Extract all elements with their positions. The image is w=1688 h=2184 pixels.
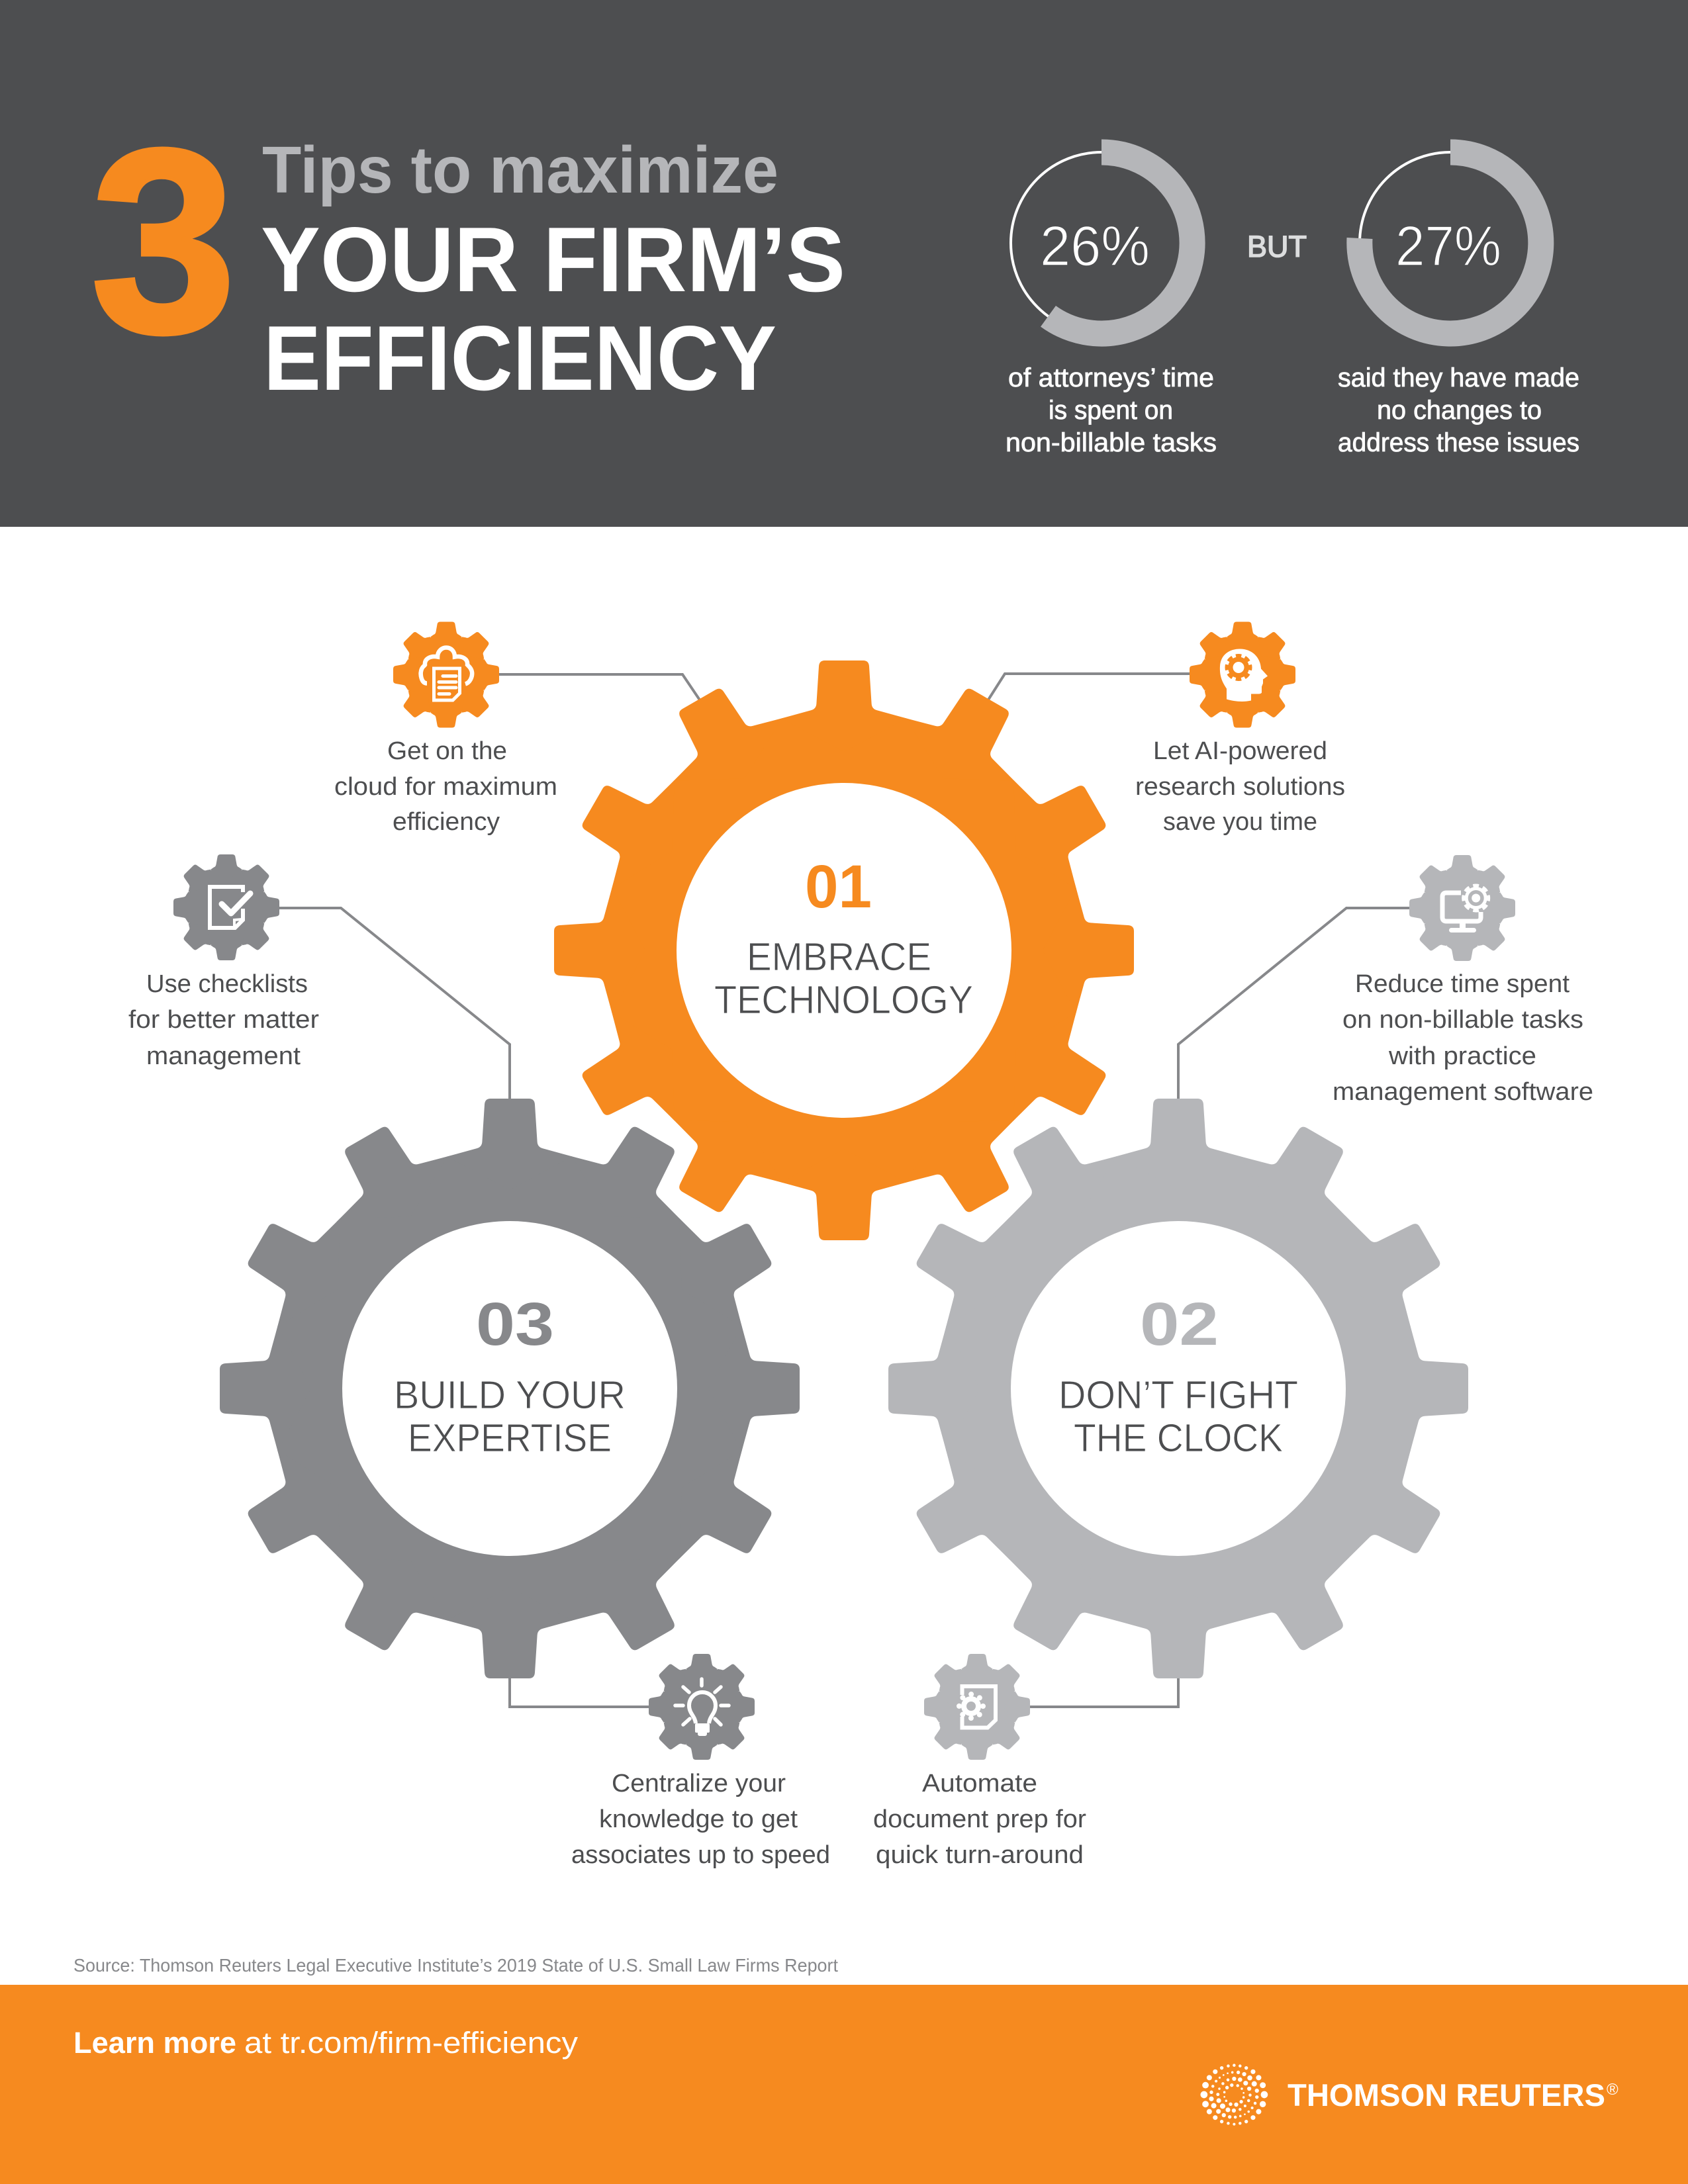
callout: AI research	[1135, 737, 1345, 836]
gear 03: build your expertise: EXPERTISE	[408, 1416, 612, 1460]
callout: automate	[873, 1770, 1086, 1869]
stat: 27 percent donut	[1360, 152, 1541, 334]
callout: practice management	[1333, 970, 1593, 1106]
registered mark: ®	[1607, 2081, 1618, 2099]
icon: checklist gear	[173, 854, 279, 960]
BUT label: BUT	[1247, 230, 1307, 263]
callout: knowledge	[571, 1770, 830, 1869]
gear 02: don't fight the clock: THE CLOCK	[1074, 1416, 1283, 1460]
callout: automate: document prep for	[873, 1805, 1086, 1833]
callout: practice management: with practice	[1388, 1042, 1536, 1070]
callout: automate: quick turn-around	[876, 1841, 1084, 1869]
call to action: at tr.com/firm-efficiency	[244, 2026, 579, 2060]
callout: practice management: on non-billable tasks	[1342, 1006, 1583, 1034]
callout: cloud: Get on the	[387, 737, 507, 765]
connector lines	[278, 674, 1410, 1707]
callout: knowledge: knowledge to get	[599, 1805, 798, 1833]
panel: header band	[0, 0, 1688, 527]
gear 02: don't fight the clock: DON’T FIGHT	[1058, 1373, 1298, 1417]
call to action	[73, 2026, 579, 2060]
gear 01: embrace technology: 01	[805, 853, 872, 921]
stat: 27 percent donut: 27%	[1395, 215, 1501, 278]
stat: 26 percent caption: non-billable tasks	[1006, 428, 1217, 457]
icon: light bulb gear	[649, 1654, 755, 1760]
gear 01: embrace technology	[554, 660, 1134, 1240]
callout: practice management: management software	[1333, 1078, 1593, 1106]
title: EFFICIENCY	[263, 307, 776, 410]
icon: cloud document gear	[393, 622, 499, 728]
stat: 27 percent caption: said they have made	[1338, 363, 1579, 392]
stat: 27 percent caption: address these issues	[1338, 428, 1579, 457]
callout: AI research: research solutions	[1135, 773, 1345, 801]
callout: checklists: management	[146, 1042, 301, 1070]
icon: AI head gear	[1190, 622, 1295, 728]
icon: document gear	[924, 1654, 1030, 1760]
logo mark: dotted globe	[1200, 2064, 1268, 2126]
gear 03: build your expertise	[220, 1099, 800, 1678]
callout: cloud: efficiency	[393, 808, 500, 836]
source note: Source: Thomson Reuters Legal Executive Institute’s 2019 State of U.S. Small Law Firms Report	[73, 1955, 838, 1976]
title	[261, 133, 845, 410]
stat: 27 percent caption	[1338, 363, 1579, 457]
callout: knowledge: associates up to speed	[571, 1841, 830, 1869]
callout: AI research: Let AI-powered	[1153, 737, 1327, 765]
stat: 26 percent caption: of attorneys’ time	[1008, 363, 1214, 392]
title: YOUR FIRM’S	[261, 208, 845, 311]
call to action: Learn more	[73, 2026, 236, 2060]
callout: AI research: save you time	[1163, 808, 1317, 836]
gear 01: embrace technology: TECHNOLOGY	[714, 978, 973, 1022]
panel: footer band	[0, 1985, 1688, 2184]
gear 02: don't fight the clock	[888, 1099, 1468, 1678]
title: Tips to maximize	[262, 133, 778, 207]
callout: checklists: for better matter	[128, 1006, 319, 1034]
stat: 26 percent donut: 26%	[1040, 215, 1150, 278]
stat: 26 percent caption	[1006, 363, 1217, 457]
callout: practice management: Reduce time spent	[1355, 970, 1570, 998]
stat: 27 percent caption: no changes to	[1377, 396, 1542, 425]
callout: knowledge: Centralize your	[612, 1770, 786, 1797]
callout: cloud	[334, 737, 557, 836]
gear 01: embrace technology: EMBRACE	[747, 935, 931, 979]
icon: monitor gear	[1409, 855, 1515, 961]
gear 03: build your expertise: BUILD YOUR	[394, 1373, 626, 1417]
logo wordmark: THOMSON REUTERS	[1288, 2077, 1605, 2113]
stat: 26 percent caption: is spent on	[1049, 396, 1173, 425]
callout: checklists	[128, 970, 319, 1070]
callout: checklists: Use checklists	[146, 970, 308, 998]
big number 3: 3	[91, 95, 236, 387]
stat: 26 percent donut	[1011, 152, 1192, 334]
gear 02: don't fight the clock: 02	[1140, 1291, 1219, 1358]
callout: cloud: cloud for maximum	[334, 773, 557, 801]
gear 03: build your expertise: 03	[476, 1291, 554, 1358]
callout: automate: Automate	[922, 1770, 1037, 1797]
